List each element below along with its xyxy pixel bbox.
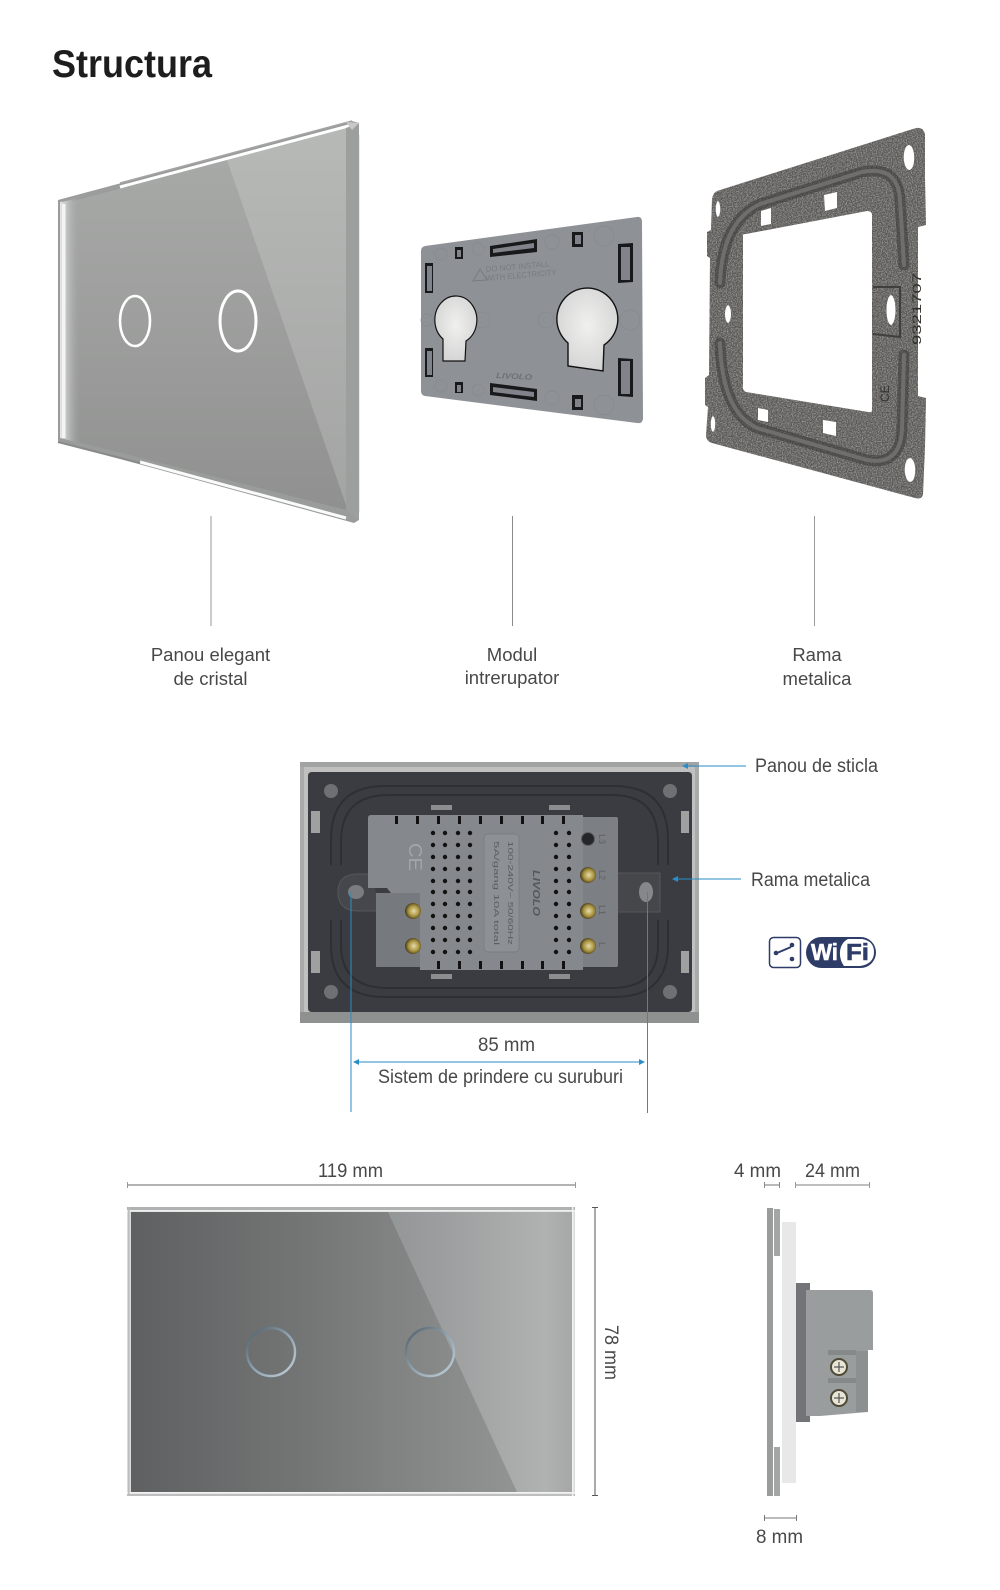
terminal labels bbox=[597, 834, 607, 947]
label: glass panel: Panou elegant bbox=[151, 644, 270, 665]
terminal labels: L bbox=[597, 942, 607, 947]
side terminal bbox=[856, 1351, 868, 1412]
label: glass panel: de cristal bbox=[173, 668, 248, 689]
callout: glass panel arrow bbox=[682, 763, 746, 769]
panel: switch module photo bbox=[421, 217, 643, 423]
touch button left bbox=[120, 296, 150, 346]
dimension line: 8 mm bbox=[764, 1515, 796, 1521]
warning text: DO NOT INSTALL bbox=[485, 259, 550, 274]
frame CE mark: CE bbox=[878, 385, 892, 402]
panel: side view bbox=[767, 1208, 873, 1496]
label: module: intrerupator bbox=[465, 667, 559, 688]
touch button left bbox=[247, 1328, 295, 1376]
guide lines for screw distance bbox=[351, 892, 648, 1113]
dimension line: width bbox=[127, 1182, 576, 1188]
module body bbox=[368, 815, 583, 970]
callout label: frame: Rama metalica bbox=[751, 870, 870, 891]
rating label bbox=[484, 834, 519, 952]
terminal labels: L3 bbox=[597, 834, 607, 844]
rating label: 100-240V~ 50/60Hz bbox=[506, 841, 515, 945]
dimension line: height bbox=[592, 1207, 598, 1496]
callout: frame arrow bbox=[672, 876, 741, 882]
frame center tab bbox=[873, 287, 900, 337]
dimension label: width: 119 mm bbox=[318, 1161, 383, 1182]
module opening right bbox=[557, 288, 618, 371]
dimension: 85 mm: 85 mm bbox=[478, 1035, 535, 1056]
touch button right bbox=[406, 1328, 454, 1376]
left screw slot bbox=[338, 874, 380, 911]
brand mark: LIVOLO bbox=[496, 371, 533, 382]
rating label: 5A/gang 10A total bbox=[492, 841, 501, 946]
vent holes bbox=[395, 816, 571, 969]
warning text bbox=[473, 259, 558, 283]
module opening left bbox=[435, 296, 477, 361]
icon: two-way switch bbox=[770, 938, 800, 968]
side mounting board bbox=[782, 1222, 796, 1483]
icon: wifi logo: Wi bbox=[811, 939, 838, 965]
dimension line: 24 mm bbox=[795, 1182, 870, 1188]
label: frame: metalica bbox=[783, 668, 852, 689]
terminal labels: L2 bbox=[597, 870, 607, 880]
leader line: panel bbox=[210, 516, 212, 626]
callout label: glass panel: Panou de sticla bbox=[755, 756, 878, 777]
frame stamped code: 9321707 bbox=[912, 273, 924, 345]
side module body bbox=[806, 1290, 873, 1416]
leader line: module bbox=[512, 516, 513, 626]
dimension label: 8 mm: 8 mm bbox=[756, 1527, 803, 1548]
label: module: Modul bbox=[487, 644, 537, 665]
title: Structura bbox=[52, 43, 212, 86]
warning text: WITH ELECTRICITY bbox=[485, 268, 558, 283]
dimension label: height: 78 mm bbox=[600, 1325, 621, 1380]
dark screw top right bbox=[582, 832, 594, 846]
panel: rear view of switch bbox=[300, 762, 699, 1023]
side screws bbox=[831, 1359, 847, 1406]
panel: front view of glass bbox=[127, 1207, 575, 1496]
leader line: frame bbox=[814, 516, 815, 626]
dimension arrow: 85 mm bbox=[353, 1059, 645, 1065]
brass terminal screws bbox=[405, 867, 596, 954]
label: frame: Rama bbox=[792, 644, 842, 665]
terminal labels: L1 bbox=[597, 905, 607, 915]
label: screw fixing system: Sistem de prindere cu suruburi bbox=[378, 1067, 623, 1088]
right terminal block bbox=[580, 817, 618, 967]
icon: wifi logo: Fi bbox=[846, 939, 869, 965]
right screw slot tab bbox=[615, 873, 660, 912]
frame groove lines bbox=[720, 171, 904, 461]
mounting holes bbox=[324, 784, 677, 999]
dimension label: 4 mm: 4 mm bbox=[734, 1161, 781, 1182]
side glass strip bbox=[767, 1208, 773, 1496]
left terminal block bbox=[376, 893, 422, 967]
icon: wifi logo bbox=[806, 937, 876, 968]
dimension label: 24 mm: 24 mm bbox=[805, 1161, 860, 1182]
rear plate bbox=[308, 772, 692, 1012]
panel: glass panel product photo bbox=[58, 121, 360, 523]
side dark housing bbox=[796, 1283, 810, 1422]
panel: metal frame photo bbox=[705, 128, 926, 498]
dimension line: 4 mm bbox=[764, 1182, 780, 1188]
CE mark: CE bbox=[405, 843, 425, 871]
touch button right bbox=[220, 291, 256, 351]
rear brand mark: LIVOLO bbox=[530, 870, 541, 916]
